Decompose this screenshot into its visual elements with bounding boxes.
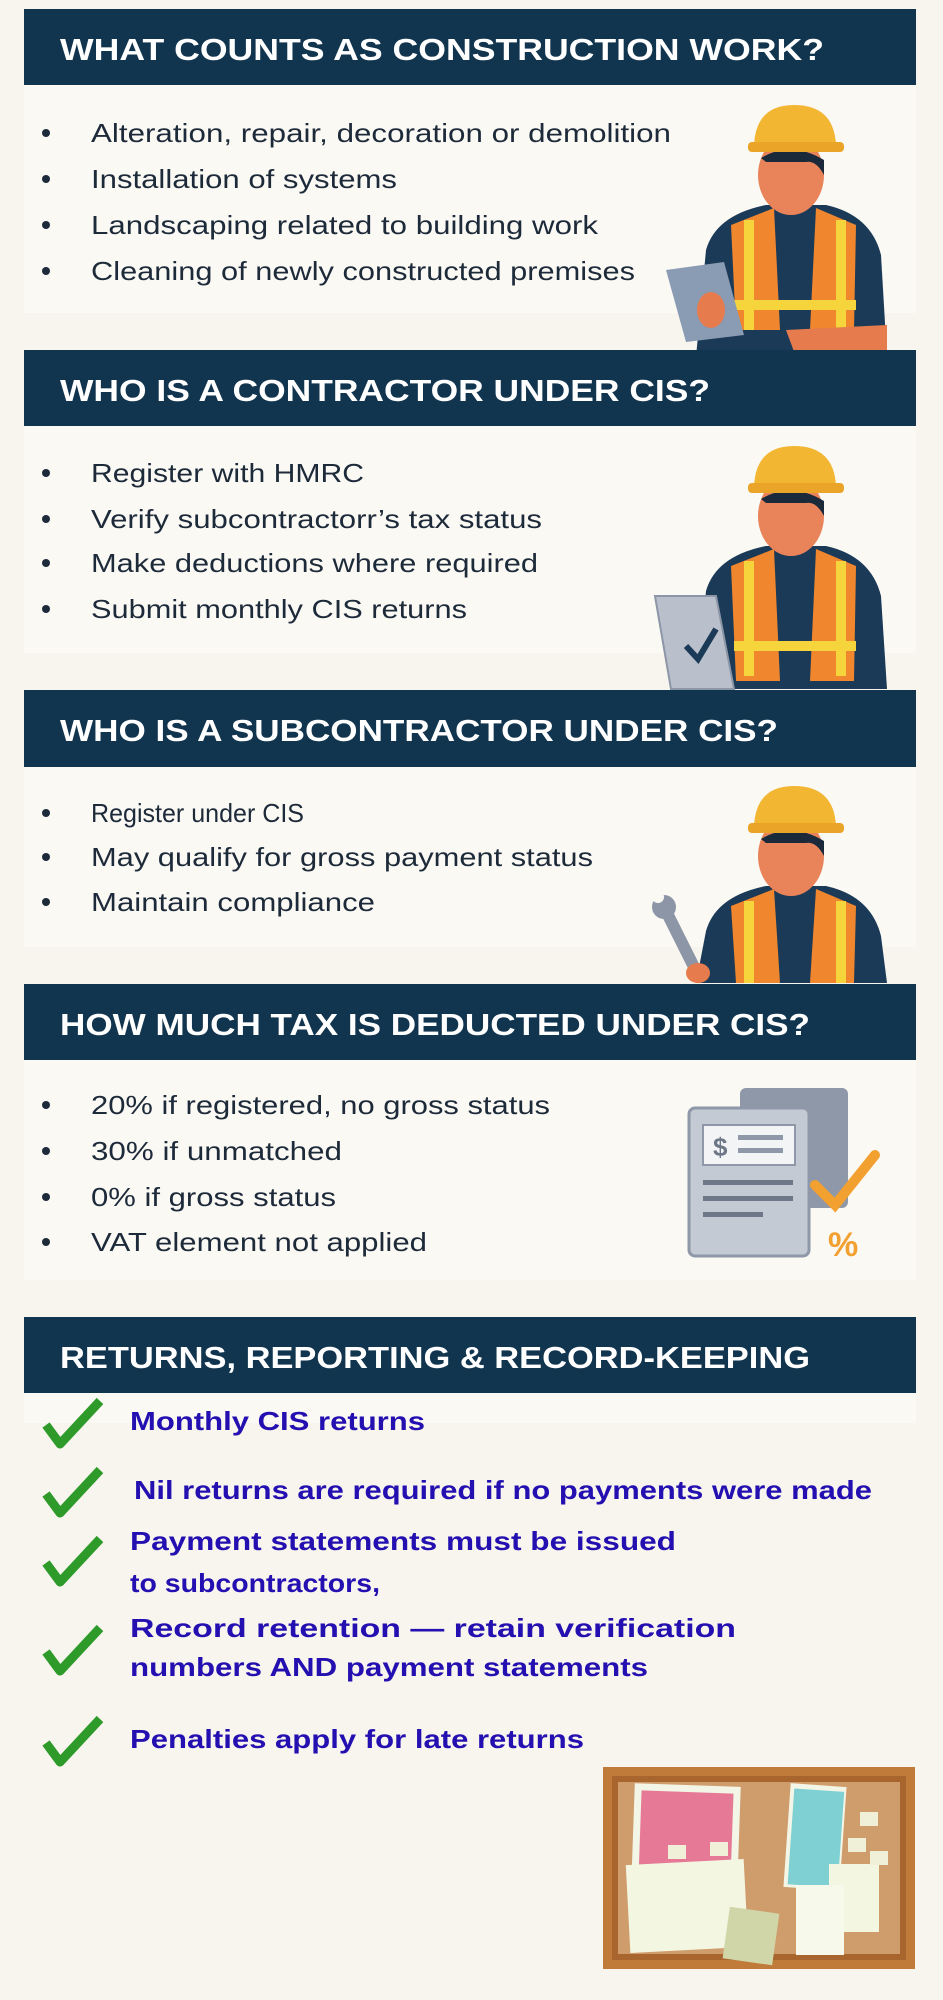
heading: who is a subcontractor	[24, 690, 916, 767]
heading: who is a contractor	[24, 350, 916, 426]
panel: contractor	[24, 350, 916, 689]
icon: tax document: %	[828, 1226, 858, 1264]
panel: tax deducted	[24, 984, 916, 1280]
bullet list: tax rates: VAT element not applied	[91, 1227, 427, 1257]
icon: worker with tablet	[666, 105, 887, 357]
bullet list: subcontractor	[42, 798, 593, 917]
panel: returns and record-keeping	[24, 1317, 916, 1969]
panel: subcontractor	[24, 690, 916, 983]
icon: corkboard	[603, 1767, 915, 1969]
bullet list: contractor duties: Submit monthly CIS returns	[91, 594, 467, 624]
heading: returns reporting	[24, 1317, 916, 1393]
heading: what counts as construction work: WHAT COUNTS AS CONSTRUCTION WORK?	[60, 32, 824, 67]
bullet list: contractor duties: Verify subcontractorr’s tax status	[91, 504, 542, 534]
bullet list: subcontractor: Register under CIS	[91, 798, 304, 828]
heading: how much tax: HOW MUCH TAX IS DEDUCTED UNDER CIS?	[60, 1007, 810, 1042]
bullet list: subcontractor: May qualify for gross payment status	[91, 842, 593, 872]
icon: worker with wrench	[652, 786, 887, 983]
bullet list: contractor duties: Make deductions where required	[91, 548, 538, 578]
icon: worker with checklist	[655, 446, 887, 689]
bullet list: construction work: Alteration, repair, decoration or demolition	[91, 118, 671, 148]
bullet list: construction work: Landscaping related to building work	[91, 210, 599, 240]
bullet list: construction work: Cleaning of newly constructed premises	[91, 256, 635, 286]
heading: who is a subcontractor: WHO IS A SUBCONTRACTOR UNDER CIS?	[60, 713, 778, 748]
panel: construction work	[24, 9, 916, 357]
icon: tax document	[689, 1088, 875, 1264]
bullet list: tax rates: 0% if gross status	[91, 1182, 336, 1212]
bullet list: tax rates: 20% if registered, no gross status	[91, 1090, 550, 1120]
heading: who is a contractor: WHO IS A CONTRACTOR UNDER CIS?	[60, 373, 710, 408]
bullet list: contractor duties: Register with HMRC	[91, 458, 364, 488]
bullet list: contractor duties	[42, 458, 542, 624]
bullet list: tax rates	[42, 1090, 550, 1257]
checklist: returns requirements	[46, 1401, 872, 1762]
checklist: returns requirements: Record retention — retain verification	[130, 1613, 736, 1643]
heading: returns reporting: RETURNS, REPORTING & RECORD-KEEPING	[60, 1340, 810, 1375]
bullet list: construction work	[42, 118, 671, 286]
checklist: returns requirements: Monthly CIS returns	[130, 1406, 425, 1436]
checklist: returns requirements: Nil returns are required if no payments were made	[134, 1475, 872, 1505]
bullet list: subcontractor: Maintain compliance	[91, 887, 375, 917]
checklist: returns requirements: numbers AND payment statements	[130, 1652, 648, 1682]
icon: tax document: $	[713, 1132, 728, 1162]
heading: how much tax	[24, 984, 916, 1060]
checklist: returns requirements: Penalties apply for late returns	[130, 1724, 584, 1754]
bullet list: tax rates: 30% if unmatched	[91, 1136, 342, 1166]
bullet list: construction work: Installation of systems	[91, 164, 397, 194]
checklist: returns requirements: Payment statements must be issued	[130, 1526, 676, 1556]
checklist: returns requirements: to subcontractors,	[130, 1568, 380, 1598]
heading: what counts as construction work	[24, 9, 916, 85]
